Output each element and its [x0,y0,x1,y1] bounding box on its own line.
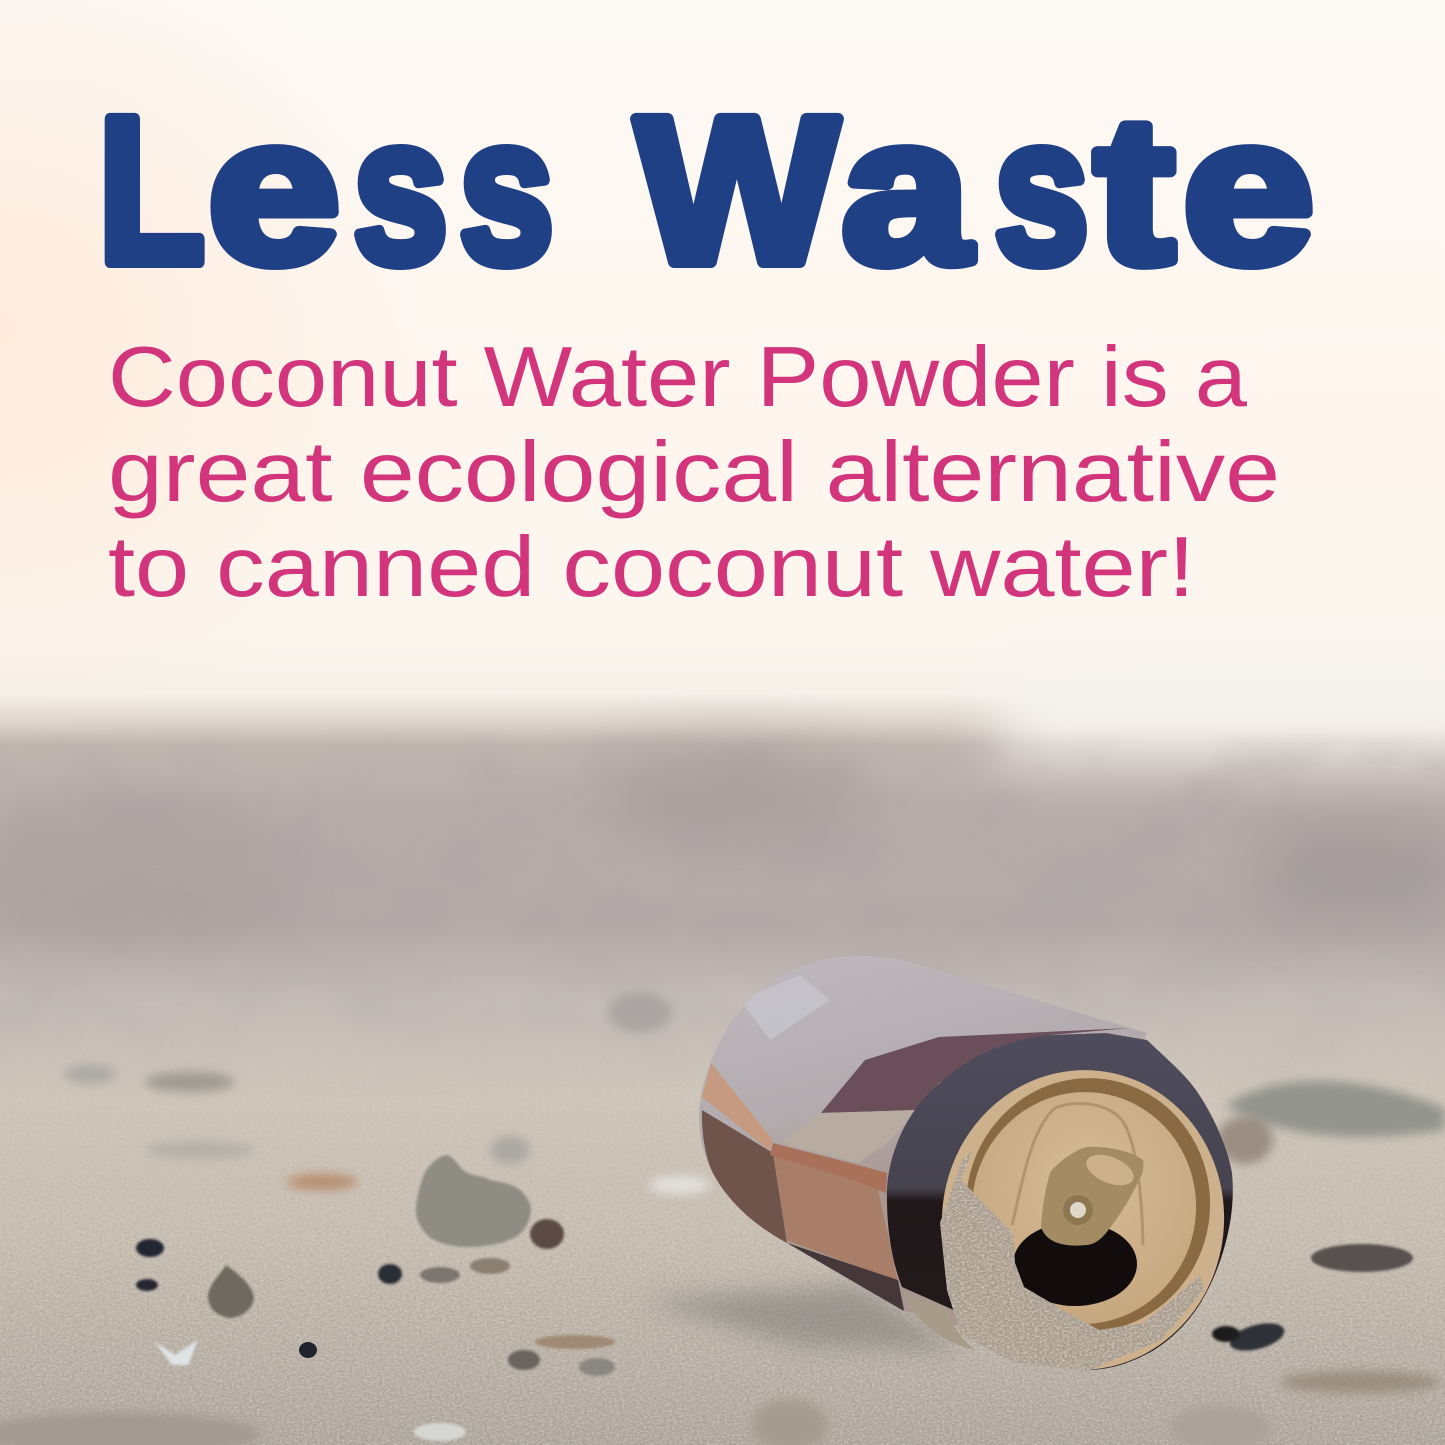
subtitle text [108,330,1280,615]
can lid panel [957,1078,1211,1338]
title: e [1183,75,1314,307]
sand crust on band edge [902,1291,975,1350]
pebbles and stones on the sand [64,992,1445,1441]
dark can shoulder band [887,1033,1233,1370]
subtitle text: great ecological alternative [108,425,1280,520]
crushed can lying on the sand [699,956,1239,1384]
can body [699,956,1147,1340]
can body label reflections [702,975,1130,1315]
title: W [636,75,839,307]
can lid rim [927,1056,1239,1384]
title: L [98,75,205,307]
title: s [994,75,1089,307]
pull tab [1041,1147,1143,1246]
sand crust on lid [940,1150,1204,1371]
title: s [459,75,554,307]
subtitle text: Coconut Water Powder is a [108,330,1248,425]
can opening [1013,1222,1137,1306]
title: s [353,75,448,307]
lid pressed groove [1012,1103,1143,1245]
title [98,75,1314,307]
can lid inner well [950,1062,1226,1348]
title: e [208,75,340,307]
title: a [842,75,971,307]
title: t [1095,75,1174,307]
subtitle text: to canned coconut water! [108,520,1195,615]
